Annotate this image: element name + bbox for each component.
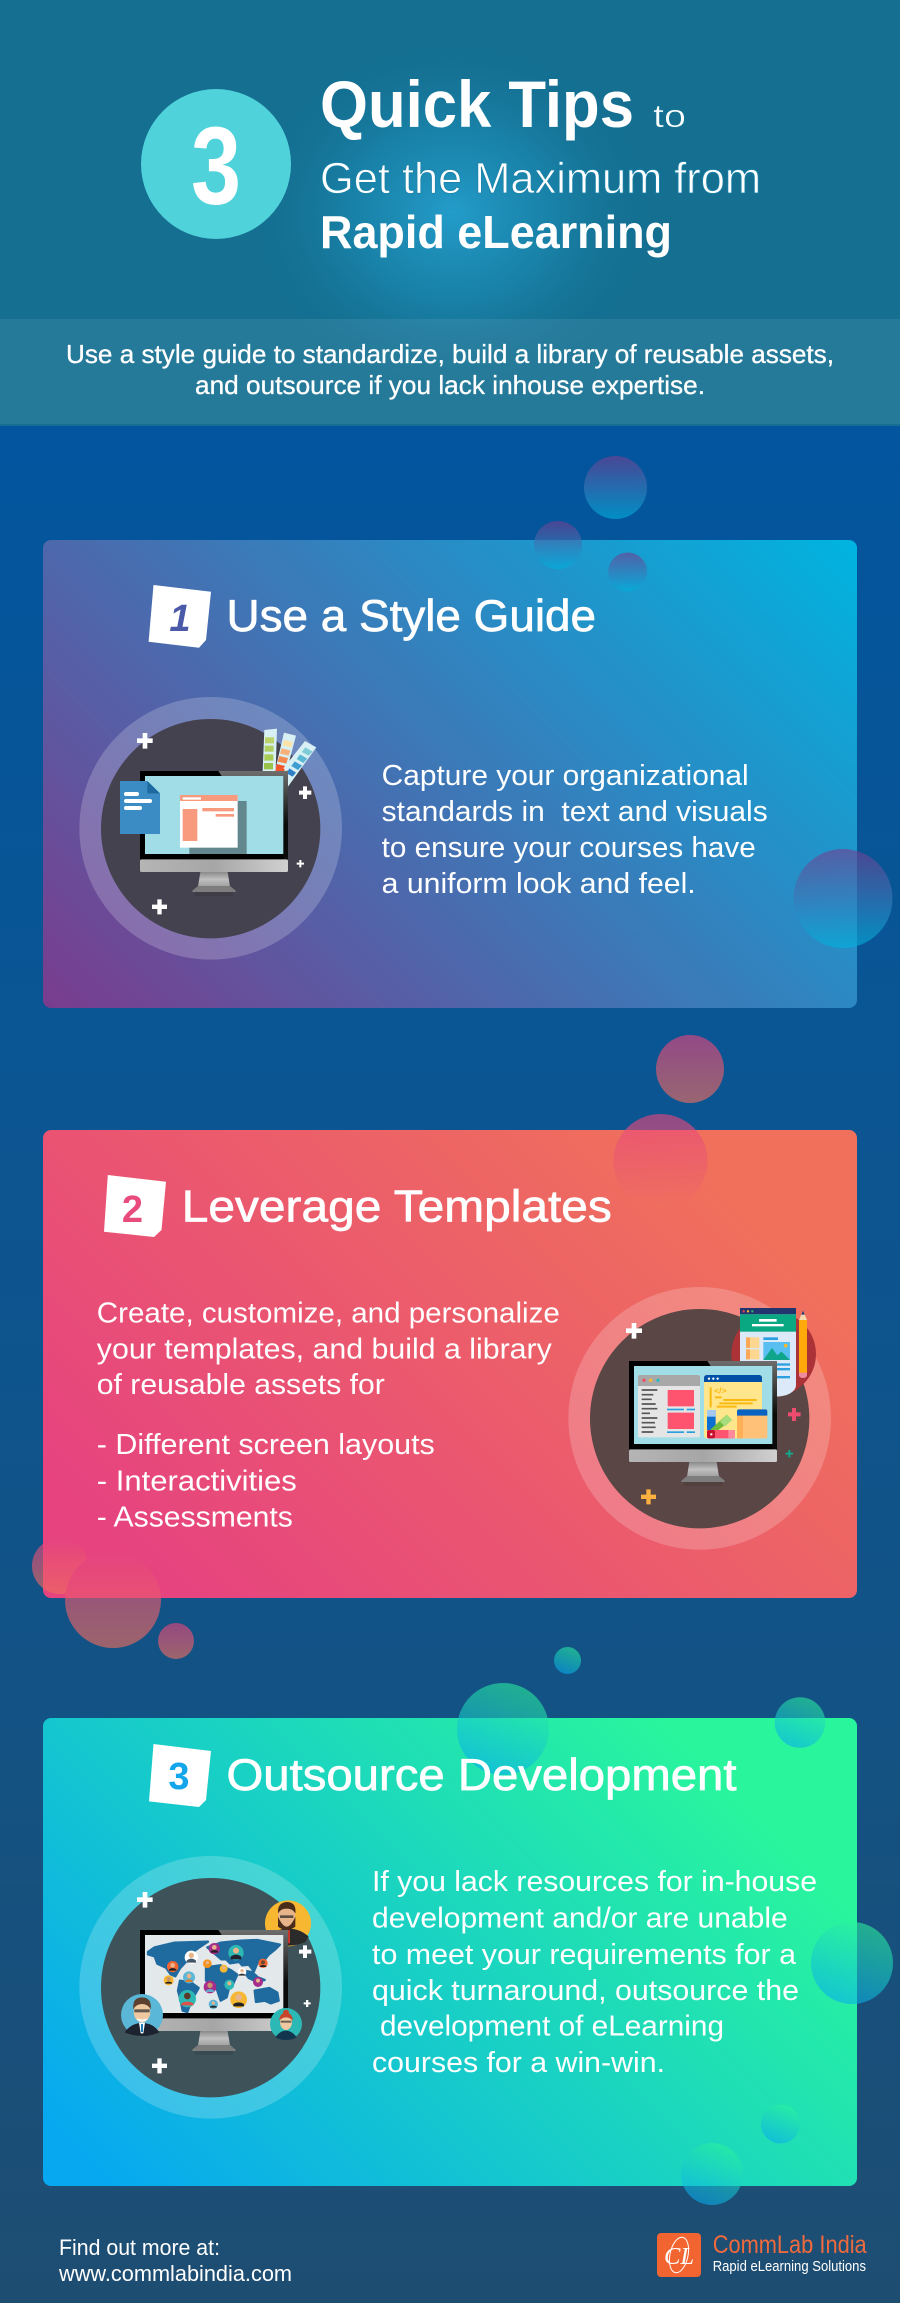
text: card 2 body: - Assessments xyxy=(97,1502,293,1534)
footer: logo xyxy=(657,2231,867,2277)
heading: outsource development: 3 xyxy=(168,1756,190,1798)
text: card 3 body: If you lack resources for in-house xyxy=(372,1866,817,1898)
heading: use a style guide: 1 xyxy=(169,598,191,640)
text: card 1 body: Capture your organizational xyxy=(382,760,749,792)
text: card 3 body: courses for a win-win. xyxy=(372,2047,665,2079)
avatar: man with glasses xyxy=(121,1994,163,2036)
bubbles: middle group xyxy=(32,1035,724,1659)
text: card 2 body: - Different screen layouts xyxy=(97,1429,435,1461)
heading: outsource development xyxy=(149,1744,737,1807)
icon: big number 3 circle: 3 xyxy=(191,105,241,228)
text: card 2 body: your templates, and build a library xyxy=(97,1334,553,1366)
footer: website: Find out more at: xyxy=(59,2235,220,2260)
text: card 3 body: development of eLearning xyxy=(380,2011,724,2043)
text: card 3 body: development and/or are unable xyxy=(372,1903,788,1935)
avatar: bearded man behind monitor xyxy=(265,1900,311,1946)
heading: use a style guide: Use a Style Guide xyxy=(226,592,596,641)
heading: outsource development: Outsource Development xyxy=(226,1751,737,1800)
footer: website: www.commlabindia.com xyxy=(58,2261,292,2286)
screen: layout window xyxy=(638,1375,700,1437)
screen: code window: </> xyxy=(714,1385,727,1395)
bubbles: lower group xyxy=(457,1647,893,2205)
heading: leverage templates xyxy=(104,1175,612,1237)
text: card 3 body: to meet your requirements for a xyxy=(372,1939,796,1971)
title: Quick Tips xyxy=(320,67,634,141)
text: card 1 body: to ensure your courses have xyxy=(382,832,756,864)
title: Rapid eLearning xyxy=(320,206,672,258)
icon: big number 3 circle xyxy=(141,89,291,239)
summary text: and outsource if you lack inhouse expertise. xyxy=(195,370,705,400)
screen: small avatars xyxy=(164,1943,268,2009)
icon: style guide monitor xyxy=(79,697,342,960)
summary band xyxy=(0,319,900,424)
text: card 1 body xyxy=(382,760,768,900)
text: card 2 body: Create, customize, and personalize xyxy=(97,1298,560,1330)
icon: templates monitor xyxy=(568,1287,831,1550)
footer: logo: Rapid eLearning Solutions xyxy=(713,2259,866,2275)
text: card 3 body xyxy=(372,1866,817,2079)
text: card 1 body: standards in text and visuals xyxy=(382,796,768,828)
title: to xyxy=(653,98,686,134)
panel: header xyxy=(0,0,900,426)
footer: logo: CommLab India xyxy=(713,2231,867,2259)
title: Get the Maximum from xyxy=(320,154,761,203)
panel: card 1 background xyxy=(43,540,857,1008)
screen: world map xyxy=(148,1940,280,2012)
footer: logo: CL xyxy=(664,2244,694,2270)
panel: card 2 background xyxy=(43,1130,857,1598)
title xyxy=(320,67,761,258)
heading: use a style guide xyxy=(149,585,596,648)
panel: card 3 background xyxy=(43,1718,857,2186)
icon: outsourcing monitor with map xyxy=(79,1856,342,2119)
bubbles: top group xyxy=(534,456,892,948)
text: card 3 body: quick turnaround, outsource the xyxy=(372,1975,799,2007)
footer: website xyxy=(58,2235,292,2286)
text: card 1 body: a uniform look and feel. xyxy=(382,868,696,900)
summary text: Use a style guide to standardize, build a library of reusable assets, xyxy=(66,339,834,369)
avatar: woman xyxy=(270,2008,302,2040)
heading: leverage templates: Leverage Templates xyxy=(182,1183,612,1232)
text: card 2 body: of reusable assets for xyxy=(97,1369,385,1401)
screen: code window xyxy=(704,1375,767,1438)
text: card 2 body: - Interactivities xyxy=(97,1466,297,1498)
text: card 2 body xyxy=(97,1298,560,1534)
heading: leverage templates: 2 xyxy=(122,1189,143,1231)
summary text xyxy=(66,339,834,400)
